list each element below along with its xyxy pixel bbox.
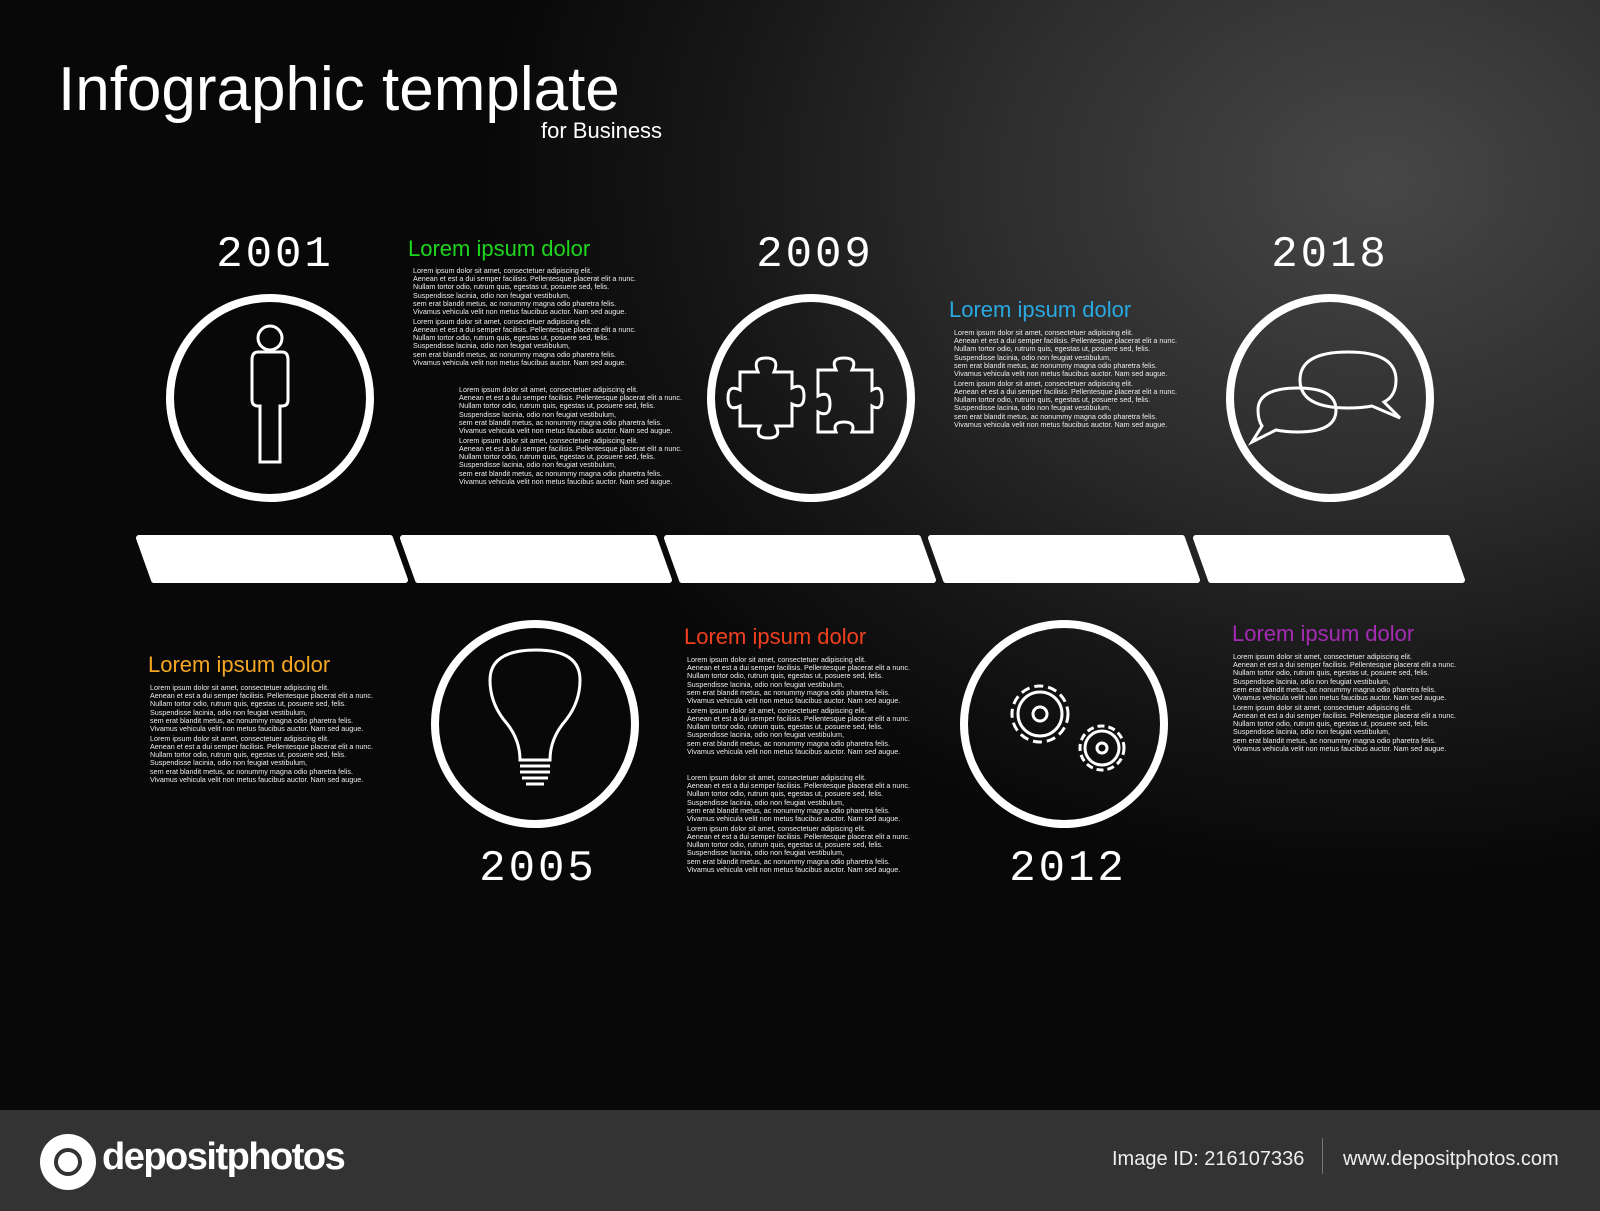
text block red 1: sem erat blandit metus, ac nonummy magna odio pharetra felis. — [687, 688, 890, 697]
text block green 1: sem erat blandit metus, ac nonummy magna odio pharetra felis. — [413, 350, 616, 359]
text block purple: Aenean et est a dui semper facilisis. Pellentesque placerat elit a nunc. — [1233, 660, 1456, 669]
heading orange: Lorem ipsum dolor — [148, 652, 330, 677]
text block green 2: Aenean et est a dui semper facilisis. Pellentesque placerat elit a nunc. — [459, 444, 682, 453]
text block orange: sem erat blandit metus, ac nonummy magna odio pharetra felis. — [150, 767, 353, 776]
text block orange: sem erat blandit metus, ac nonummy magna odio pharetra felis. — [150, 716, 353, 725]
footer logo: depositphotos — [102, 1136, 344, 1178]
heading blue: Lorem ipsum dolor — [949, 297, 1131, 322]
text block red 2: sem erat blandit metus, ac nonummy magna odio pharetra felis. — [687, 806, 890, 815]
text block blue: Suspendisse lacinia, odio non feugiat vestibulum, — [954, 403, 1111, 412]
text block green 2: Vivamus vehicula velit non metus faucibus auctor. Nam sed augue. — [459, 426, 672, 435]
text block green 2: Lorem ipsum dolor sit amet, consectetuer adipiscing elit. — [459, 385, 638, 394]
text block red 2: Suspendisse lacinia, odio non feugiat vestibulum, — [687, 798, 844, 807]
text block green 1: Aenean et est a dui semper facilisis. Pellentesque placerat elit a nunc. — [413, 325, 636, 334]
year 2001: 2001 — [216, 230, 334, 280]
year 2018: 2018 — [1271, 230, 1389, 280]
text block red 1: sem erat blandit metus, ac nonummy magna odio pharetra felis. — [687, 739, 890, 748]
text block green 2: sem erat blandit metus, ac nonummy magna odio pharetra felis. — [459, 469, 662, 478]
text block blue: sem erat blandit metus, ac nonummy magna odio pharetra felis. — [954, 412, 1157, 421]
heading green: Lorem ipsum dolor — [408, 236, 590, 261]
text block purple — [1233, 652, 1456, 753]
text block purple: Suspendisse lacinia, odio non feugiat vestibulum, — [1233, 727, 1390, 736]
year 2009: 2009 — [756, 230, 874, 280]
text block green 1: sem erat blandit metus, ac nonummy magna odio pharetra felis. — [413, 299, 616, 308]
text block green 2: Lorem ipsum dolor sit amet, consectetuer adipiscing elit. — [459, 436, 638, 445]
title: Infographic template — [58, 55, 620, 124]
text block red 1: Lorem ipsum dolor sit amet, consectetuer adipiscing elit. — [687, 706, 866, 715]
circle 2001 person — [170, 298, 370, 498]
text block green 1: Vivamus vehicula velit non metus faucibus auctor. Nam sed augue. — [413, 358, 626, 367]
text block orange: Aenean et est a dui semper facilisis. Pellentesque placerat elit a nunc. — [150, 691, 373, 700]
text block green 2 — [459, 385, 682, 486]
text block green 2: Vivamus vehicula velit non metus faucibus auctor. Nam sed augue. — [459, 477, 672, 486]
text block red 2: Aenean et est a dui semper facilisis. Pellentesque placerat elit a nunc. — [687, 832, 910, 841]
text block blue: Nullam tortor odio, rutrum quis, egestas ut, posuere sed, felis. — [954, 344, 1150, 353]
text block orange: Vivamus vehicula velit non metus faucibus auctor. Nam sed augue. — [150, 724, 363, 733]
text block green 2: Nullam tortor odio, rutrum quis, egestas ut, posuere sed, felis. — [459, 452, 655, 461]
text block orange: Lorem ipsum dolor sit amet, consectetuer adipiscing elit. — [150, 683, 329, 692]
text block red 1 — [687, 655, 910, 756]
text block green 2: sem erat blandit metus, ac nonummy magna odio pharetra felis. — [459, 418, 662, 427]
text block red 1: Nullam tortor odio, rutrum quis, egestas ut, posuere sed, felis. — [687, 671, 883, 680]
text block purple: Nullam tortor odio, rutrum quis, egestas ut, posuere sed, felis. — [1233, 668, 1429, 677]
text block orange — [150, 683, 373, 784]
text block red 2 — [687, 773, 910, 874]
text block green 1: Aenean et est a dui semper facilisis. Pellentesque placerat elit a nunc. — [413, 274, 636, 283]
timeline bar — [139, 538, 1462, 580]
text block purple: sem erat blandit metus, ac nonummy magna odio pharetra felis. — [1233, 736, 1436, 745]
text block blue: Suspendisse lacinia, odio non feugiat vestibulum, — [954, 353, 1111, 362]
circle 2009 puzzle — [711, 298, 911, 498]
text block green 1: Lorem ipsum dolor sit amet, consectetuer adipiscing elit. — [413, 317, 592, 326]
text block red 2: Lorem ipsum dolor sit amet, consectetuer adipiscing elit. — [687, 824, 866, 833]
text block orange: Vivamus vehicula velit non metus faucibus auctor. Nam sed augue. — [150, 775, 363, 784]
text block purple: Vivamus vehicula velit non metus faucibus auctor. Nam sed augue. — [1233, 693, 1446, 702]
text block red 2: Vivamus vehicula velit non metus faucibus auctor. Nam sed augue. — [687, 865, 900, 874]
text block purple: Nullam tortor odio, rutrum quis, egestas ut, posuere sed, felis. — [1233, 719, 1429, 728]
text block purple: Lorem ipsum dolor sit amet, consectetuer adipiscing elit. — [1233, 703, 1412, 712]
text block orange: Lorem ipsum dolor sit amet, consectetuer adipiscing elit. — [150, 734, 329, 743]
text block orange: Suspendisse lacinia, odio non feugiat vestibulum, — [150, 758, 307, 767]
text block blue: sem erat blandit metus, ac nonummy magna odio pharetra felis. — [954, 361, 1157, 370]
text block purple: sem erat blandit metus, ac nonummy magna odio pharetra felis. — [1233, 685, 1436, 694]
text block blue: Nullam tortor odio, rutrum quis, egestas ut, posuere sed, felis. — [954, 395, 1150, 404]
text block red 1: Nullam tortor odio, rutrum quis, egestas ut, posuere sed, felis. — [687, 722, 883, 731]
text block green 1: Suspendisse lacinia, odio non feugiat vestibulum, — [413, 291, 570, 300]
text block purple: Lorem ipsum dolor sit amet, consectetuer adipiscing elit. — [1233, 652, 1412, 661]
text block green 2: Aenean et est a dui semper facilisis. Pellentesque placerat elit a nunc. — [459, 393, 682, 402]
circle 2012 gears — [964, 624, 1164, 824]
text block green 1: Lorem ipsum dolor sit amet, consectetuer adipiscing elit. — [413, 266, 592, 275]
circle 2018 speech — [1230, 298, 1430, 498]
footer logo — [40, 1134, 344, 1190]
text block green 1: Nullam tortor odio, rutrum quis, egestas ut, posuere sed, felis. — [413, 333, 609, 342]
text block green 2: Suspendisse lacinia, odio non feugiat vestibulum, — [459, 460, 616, 469]
footer image id: Image ID: 216107336 — [1112, 1148, 1304, 1170]
text block green 2: Nullam tortor odio, rutrum quis, egestas ut, posuere sed, felis. — [459, 401, 655, 410]
text block blue: Lorem ipsum dolor sit amet, consectetuer adipiscing elit. — [954, 328, 1133, 337]
text block red 1: Lorem ipsum dolor sit amet, consectetuer adipiscing elit. — [687, 655, 866, 664]
text block blue: Lorem ipsum dolor sit amet, consectetuer adipiscing elit. — [954, 379, 1133, 388]
year 2012: 2012 — [1009, 844, 1127, 894]
text block green 1 — [413, 266, 636, 367]
text block green 1: Vivamus vehicula velit non metus faucibus auctor. Nam sed augue. — [413, 307, 626, 316]
text block red 1: Suspendisse lacinia, odio non feugiat vestibulum, — [687, 730, 844, 739]
text block orange: Aenean et est a dui semper facilisis. Pellentesque placerat elit a nunc. — [150, 742, 373, 751]
text block red 1: Aenean et est a dui semper facilisis. Pellentesque placerat elit a nunc. — [687, 663, 910, 672]
text block orange: Nullam tortor odio, rutrum quis, egestas ut, posuere sed, felis. — [150, 699, 346, 708]
text block blue: Vivamus vehicula velit non metus faucibus auctor. Nam sed augue. — [954, 369, 1167, 378]
text block red 1: Aenean et est a dui semper facilisis. Pellentesque placerat elit a nunc. — [687, 714, 910, 723]
text block red 2: Lorem ipsum dolor sit amet, consectetuer adipiscing elit. — [687, 773, 866, 782]
text block orange: Suspendisse lacinia, odio non feugiat vestibulum, — [150, 708, 307, 717]
text block red 2: Nullam tortor odio, rutrum quis, egestas ut, posuere sed, felis. — [687, 789, 883, 798]
text block red 1: Suspendisse lacinia, odio non feugiat vestibulum, — [687, 680, 844, 689]
text block purple: Aenean et est a dui semper facilisis. Pellentesque placerat elit a nunc. — [1233, 711, 1456, 720]
circle 2005 bulb — [435, 624, 635, 824]
heading red: Lorem ipsum dolor — [684, 624, 866, 649]
footer — [0, 1110, 1600, 1211]
text block green 2: Suspendisse lacinia, odio non feugiat vestibulum, — [459, 410, 616, 419]
footer url: www.depositphotos.com — [1343, 1148, 1559, 1170]
text block blue: Aenean et est a dui semper facilisis. Pellentesque placerat elit a nunc. — [954, 336, 1177, 345]
subtitle: for Business — [541, 118, 662, 143]
text block red 2: Vivamus vehicula velit non metus faucibus auctor. Nam sed augue. — [687, 814, 900, 823]
text block purple: Suspendisse lacinia, odio non feugiat vestibulum, — [1233, 677, 1390, 686]
year 2005: 2005 — [479, 844, 597, 894]
text block red 2: Nullam tortor odio, rutrum quis, egestas ut, posuere sed, felis. — [687, 840, 883, 849]
text block red 2: Aenean et est a dui semper facilisis. Pellentesque placerat elit a nunc. — [687, 781, 910, 790]
text block red 1: Vivamus vehicula velit non metus faucibus auctor. Nam sed augue. — [687, 747, 900, 756]
text block green 1: Suspendisse lacinia, odio non feugiat vestibulum, — [413, 341, 570, 350]
text block blue: Aenean et est a dui semper facilisis. Pellentesque placerat elit a nunc. — [954, 387, 1177, 396]
text block green 1: Nullam tortor odio, rutrum quis, egestas ut, posuere sed, felis. — [413, 282, 609, 291]
heading purple: Lorem ipsum dolor — [1232, 621, 1414, 646]
text block purple: Vivamus vehicula velit non metus faucibus auctor. Nam sed augue. — [1233, 744, 1446, 753]
text block red 1: Vivamus vehicula velit non metus faucibus auctor. Nam sed augue. — [687, 696, 900, 705]
text block blue: Vivamus vehicula velit non metus faucibus auctor. Nam sed augue. — [954, 420, 1167, 429]
text block red 2: sem erat blandit metus, ac nonummy magna odio pharetra felis. — [687, 857, 890, 866]
text block red 2: Suspendisse lacinia, odio non feugiat vestibulum, — [687, 848, 844, 857]
text block blue — [954, 328, 1177, 429]
text block orange: Nullam tortor odio, rutrum quis, egestas ut, posuere sed, felis. — [150, 750, 346, 759]
